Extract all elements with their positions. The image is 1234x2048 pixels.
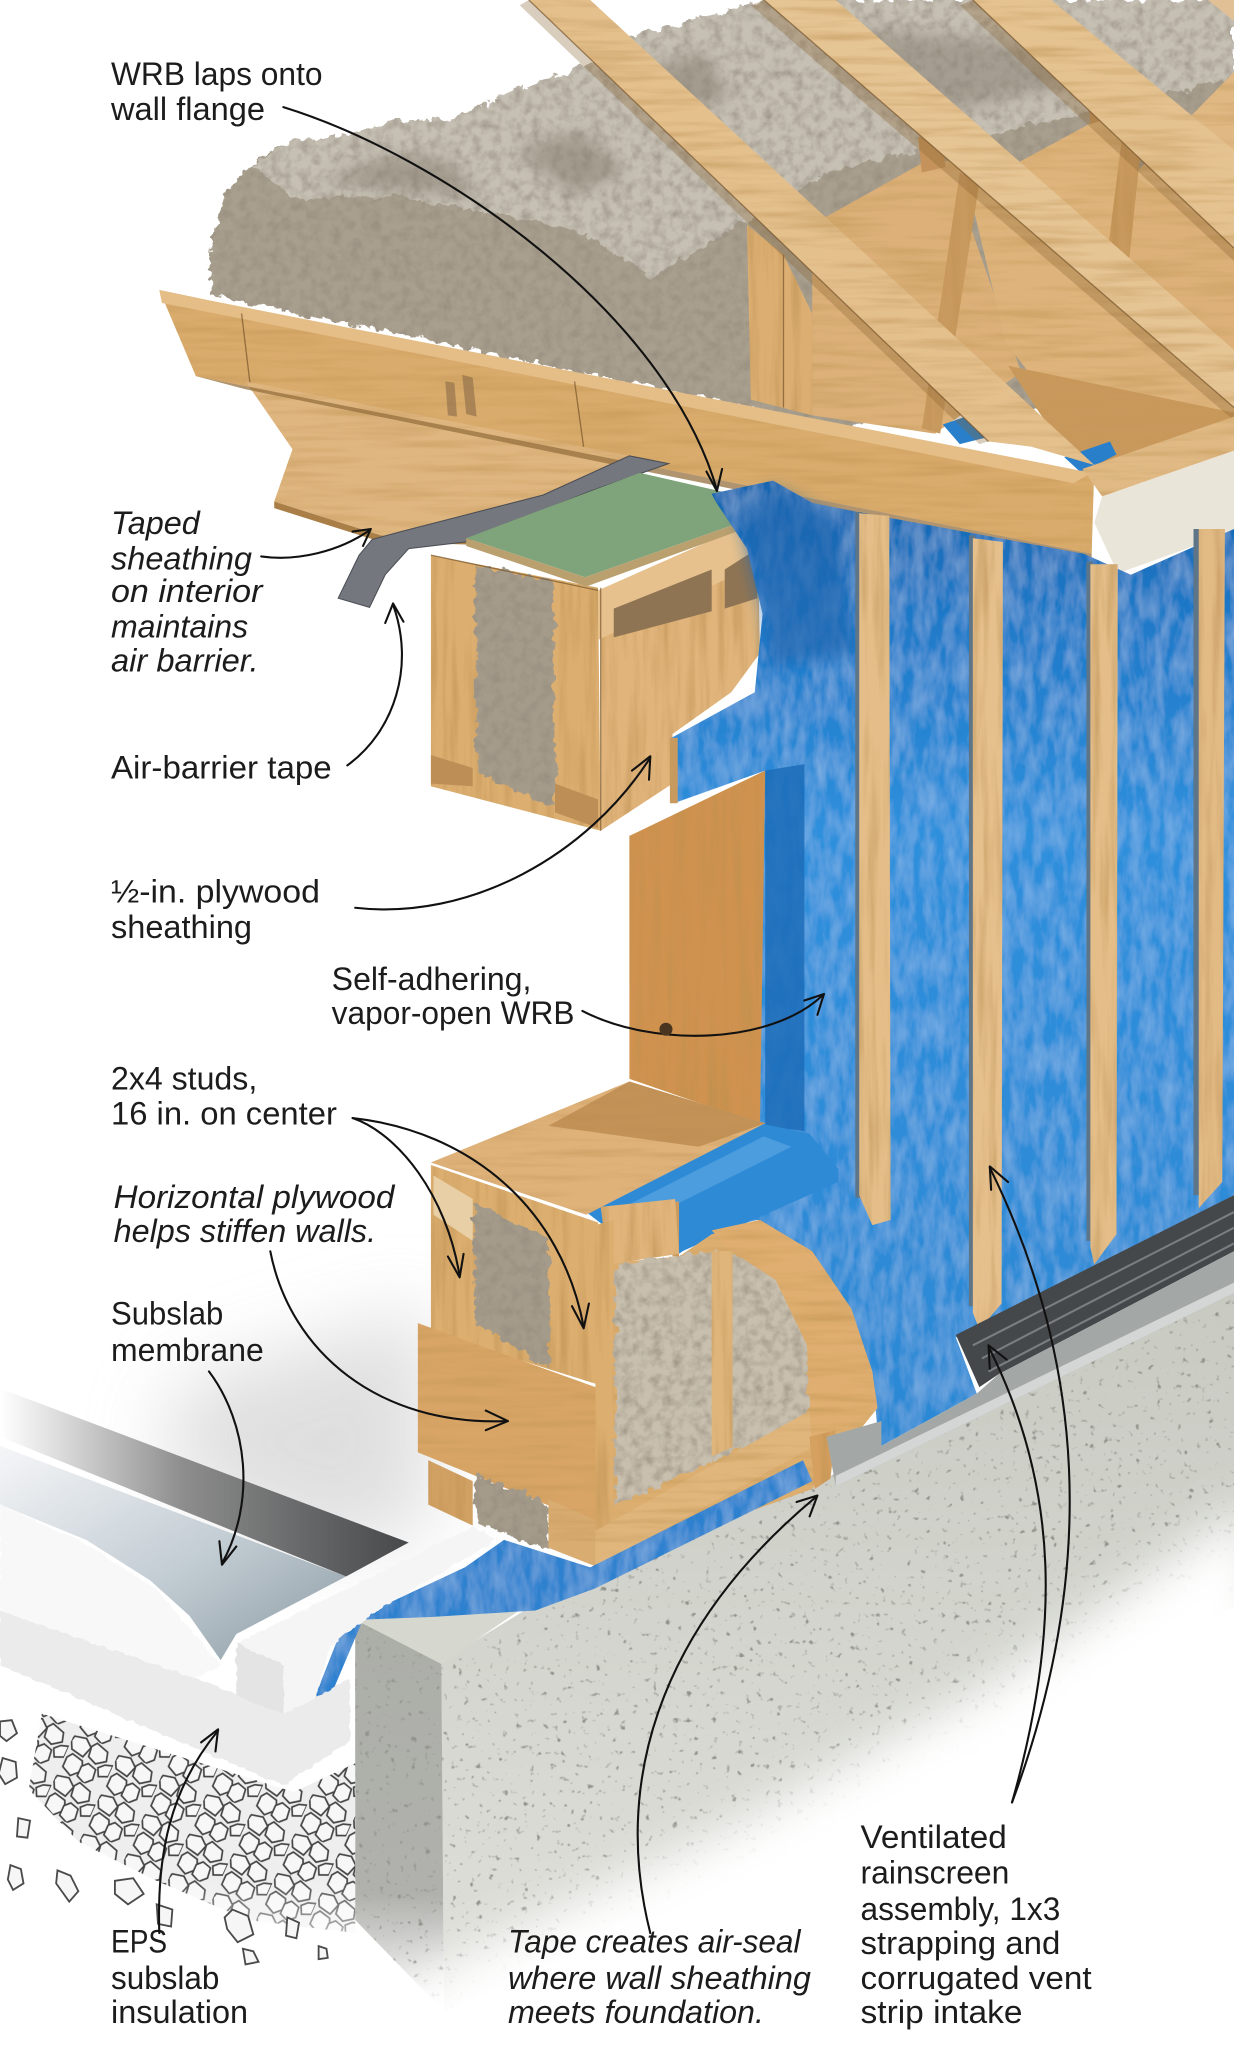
label: plywood sheathing: sheathing <box>111 908 252 945</box>
label: ventilated rainscreen: strapping and <box>861 1924 1060 1961</box>
corrugated vent strip <box>956 1195 1234 1387</box>
label: tape creates air-seal <box>508 1923 811 2030</box>
fascia corner board <box>1083 417 1234 573</box>
label: 2x4 studs: 16 in. on center <box>111 1095 337 1132</box>
wall stud bay <box>629 771 765 1126</box>
roof truss framing <box>520 0 1234 473</box>
label: subslab membrane: Subslab <box>111 1294 223 1331</box>
arrow: horizontal plywood <box>270 1251 508 1430</box>
front backing board <box>595 1223 878 1567</box>
air-barrier tape strip <box>338 456 669 607</box>
arrow: self-adhering WRB <box>582 994 824 1036</box>
label: air-barrier tape: Air-barrier tape <box>111 748 332 785</box>
lower chord <box>1008 366 1234 473</box>
label: subslab membrane <box>111 1294 264 1368</box>
attic insulation <box>209 0 1234 431</box>
sheathing edges <box>670 738 679 1256</box>
self-adhering blue WRB <box>586 481 1234 1446</box>
subslab grey membrane and dark strip <box>0 1388 409 1660</box>
label: WRB laps onto wall flange: wall flange <box>110 90 265 127</box>
concrete wall shadow on ground <box>157 1306 431 1548</box>
green roof sheathing panel <box>466 473 755 586</box>
label: self-adhering WRB: vapor-open WRB <box>332 994 575 1031</box>
lower wall block <box>418 1081 878 1567</box>
top plate beam <box>159 290 1094 554</box>
arrow: subslab membrane <box>209 1371 243 1565</box>
label: EPS subslab insulation: insulation <box>111 1993 248 2030</box>
label: taped sheathing: on interior <box>111 572 264 609</box>
arrow: EPS <box>159 1729 218 1933</box>
label: 2x4 studs: 2x4 studs, <box>111 1059 257 1096</box>
center stud <box>712 1251 733 1456</box>
truss webs and stubs <box>918 91 1111 172</box>
label: plywood sheathing <box>111 873 320 945</box>
under-beam plywood panel <box>196 376 1092 562</box>
label: WRB laps onto wall flange <box>110 55 323 127</box>
label: taped sheathing: sheathing <box>111 539 252 576</box>
lumber stamp <box>445 375 477 417</box>
label: EPS subslab insulation: subslab <box>111 1959 219 1996</box>
horizontal plywood <box>418 1323 598 1526</box>
left face studs <box>431 1165 598 1384</box>
vertical truss post <box>747 225 812 415</box>
arrow: tape air-seal <box>638 1496 817 1933</box>
label: EPS subslab insulation <box>111 1923 248 2030</box>
shaded return of WRB <box>765 764 804 1131</box>
label: taped sheathing: Taped <box>111 504 201 541</box>
arrow: air-barrier tape <box>347 603 403 765</box>
face board <box>601 1199 679 1264</box>
arrow: WRB laps <box>283 107 722 491</box>
label: ventilated rainscreen <box>861 1818 1092 2030</box>
soft fade at bottom of foundation <box>379 1502 1234 2048</box>
label: taped sheathing <box>111 504 264 678</box>
label: tape creates air-seal: meets foundation. <box>508 1993 764 2030</box>
rainscreen strapping <box>855 512 1225 1330</box>
label: ventilated rainscreen: Ventilated <box>861 1818 1007 1855</box>
label: plywood sheathing: ½-in. plywood <box>111 873 320 910</box>
label: horizontal plywood: Horizontal plywood <box>114 1178 395 1215</box>
bottom plate <box>595 1411 812 1567</box>
arched plywood <box>712 1220 878 1447</box>
plywood gusset panels <box>812 159 1021 434</box>
sill tape <box>313 1460 812 1701</box>
label: ventilated rainscreen: strip intake <box>861 1993 1022 2030</box>
knot on stud <box>659 1023 672 1036</box>
lower stud and cavity <box>428 1460 473 1526</box>
label: self-adhering WRB: Self-adhering, <box>332 960 531 997</box>
label: taped sheathing: maintains <box>111 607 248 644</box>
arrow: taped sheathing <box>261 529 371 558</box>
label: horizontal plywood <box>114 1178 395 1249</box>
EPS foam insulation <box>0 1505 496 1785</box>
label: ventilated rainscreen: assembly, 1x3 <box>861 1890 1060 1927</box>
label: WRB laps onto wall flange: WRB laps onto <box>111 55 323 92</box>
arrows: ventilated rainscreen <box>989 1166 1070 1802</box>
front cavity insulation <box>615 1251 810 1505</box>
label: taped sheathing: air barrier. <box>111 641 259 678</box>
metal flashing <box>827 1251 1234 1486</box>
label: tape creates air-seal: Tape creates air-seal <box>508 1923 801 1960</box>
rafter shadows <box>520 0 1234 444</box>
label: ventilated rainscreen: corrugated vent <box>861 1959 1092 1996</box>
arrows: 2x4 studs <box>353 1118 589 1328</box>
concrete foundation <box>355 1287 1234 2048</box>
arrow: plywood sheathing <box>355 756 650 909</box>
rafters <box>973 0 1234 248</box>
label: tape creates air-seal: where wall sheathing <box>508 1959 811 1996</box>
label: horizontal plywood: helps stiffen walls. <box>114 1212 376 1249</box>
upper truncated wall block <box>431 520 760 831</box>
top plywood face <box>431 1081 765 1215</box>
label: subslab membrane: membrane <box>111 1331 264 1368</box>
label: EPS subslab insulation: EPS <box>111 1923 167 1960</box>
blue glimpses behind truss <box>943 408 1116 473</box>
flap at base of stud bay <box>586 1123 838 1254</box>
label: ventilated rainscreen: rainscreen <box>861 1853 1009 1890</box>
gravel base <box>0 1714 355 1964</box>
label: 2x4 studs <box>111 1059 337 1132</box>
label: self-adhering WRB <box>332 960 575 1031</box>
